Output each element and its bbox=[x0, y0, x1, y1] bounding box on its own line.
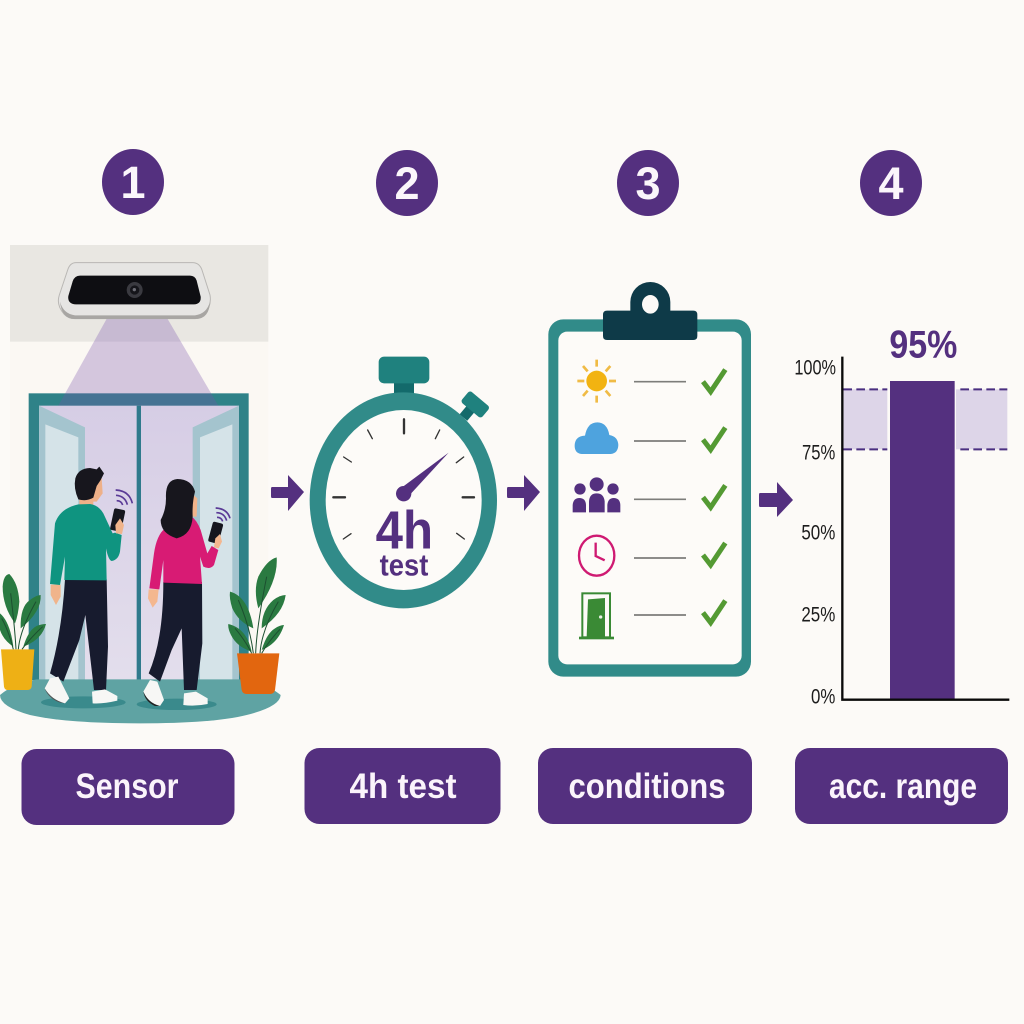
label: 4h test bbox=[304, 748, 500, 824]
elevator door frame bbox=[29, 393, 249, 680]
wall backdrop bbox=[10, 342, 268, 682]
panel: conditions clipboard bbox=[548, 282, 751, 677]
step badge 2 bbox=[376, 150, 438, 216]
axis labels: 75% bbox=[802, 441, 835, 465]
stopwatch crown bbox=[379, 357, 429, 397]
label: Sensor: Sensor bbox=[76, 767, 179, 806]
icon: people bbox=[573, 477, 620, 512]
step badge 3: 3 bbox=[635, 158, 661, 209]
accuracy range band bbox=[843, 386, 1007, 453]
floor platform bbox=[0, 679, 281, 723]
label: acc. range: acc. range bbox=[829, 767, 977, 806]
chart axes bbox=[842, 357, 1009, 700]
check marks bbox=[703, 370, 725, 623]
person: man in green sweater bbox=[45, 467, 132, 703]
axis labels bbox=[794, 356, 836, 708]
clipboard board bbox=[548, 319, 751, 677]
stopwatch value: 4h bbox=[376, 502, 433, 561]
condition lines bbox=[634, 382, 686, 615]
tick marks bbox=[333, 419, 474, 539]
arrow 1 bbox=[271, 475, 304, 511]
label: Sensor bbox=[22, 749, 234, 825]
ceiling panel bbox=[10, 245, 268, 342]
panel: sensor scene bbox=[0, 245, 286, 723]
label: 4h test: 4h test bbox=[350, 767, 457, 806]
icon: sun bbox=[577, 360, 616, 403]
label: conditions bbox=[538, 748, 752, 824]
step badge 1 bbox=[102, 149, 164, 215]
step badge 3 bbox=[617, 150, 679, 216]
right glass door bbox=[193, 406, 239, 680]
step badge 4 bbox=[860, 150, 922, 216]
arrow 3 bbox=[759, 482, 793, 517]
axis labels: 0% bbox=[811, 684, 835, 708]
step badge 1: 1 bbox=[120, 157, 146, 208]
axis labels: 50% bbox=[801, 520, 835, 544]
ceiling sensor device bbox=[58, 263, 210, 319]
clipboard clip bbox=[603, 282, 697, 340]
axis labels: 100% bbox=[794, 356, 836, 380]
icon: cloud bbox=[575, 422, 618, 454]
step badge 4: 4 bbox=[878, 158, 904, 209]
step badge 2: 2 bbox=[394, 158, 420, 209]
stopwatch value bbox=[376, 502, 433, 582]
plant right bbox=[228, 557, 286, 694]
left glass door bbox=[39, 406, 85, 680]
icon: clock bbox=[579, 536, 614, 576]
panel: accuracy chart bbox=[794, 323, 1009, 708]
person shadows bbox=[41, 696, 217, 710]
stopwatch hand bbox=[396, 453, 449, 501]
plant left bbox=[0, 574, 46, 690]
stopwatch ring and face bbox=[310, 392, 497, 608]
axis labels: 25% bbox=[801, 602, 835, 626]
icon: door bbox=[579, 593, 614, 639]
sensor light cone bbox=[58, 312, 218, 406]
arrow 2 bbox=[507, 475, 540, 511]
label: acc. range bbox=[795, 748, 1008, 824]
stopwatch value: test bbox=[380, 548, 428, 582]
bar 95 percent bbox=[890, 381, 955, 699]
label: conditions: conditions bbox=[568, 767, 726, 806]
person: woman in magenta sweater bbox=[143, 479, 230, 706]
headline value: 95% bbox=[889, 323, 957, 367]
side button bbox=[454, 390, 490, 427]
panel: stopwatch bbox=[310, 357, 497, 608]
